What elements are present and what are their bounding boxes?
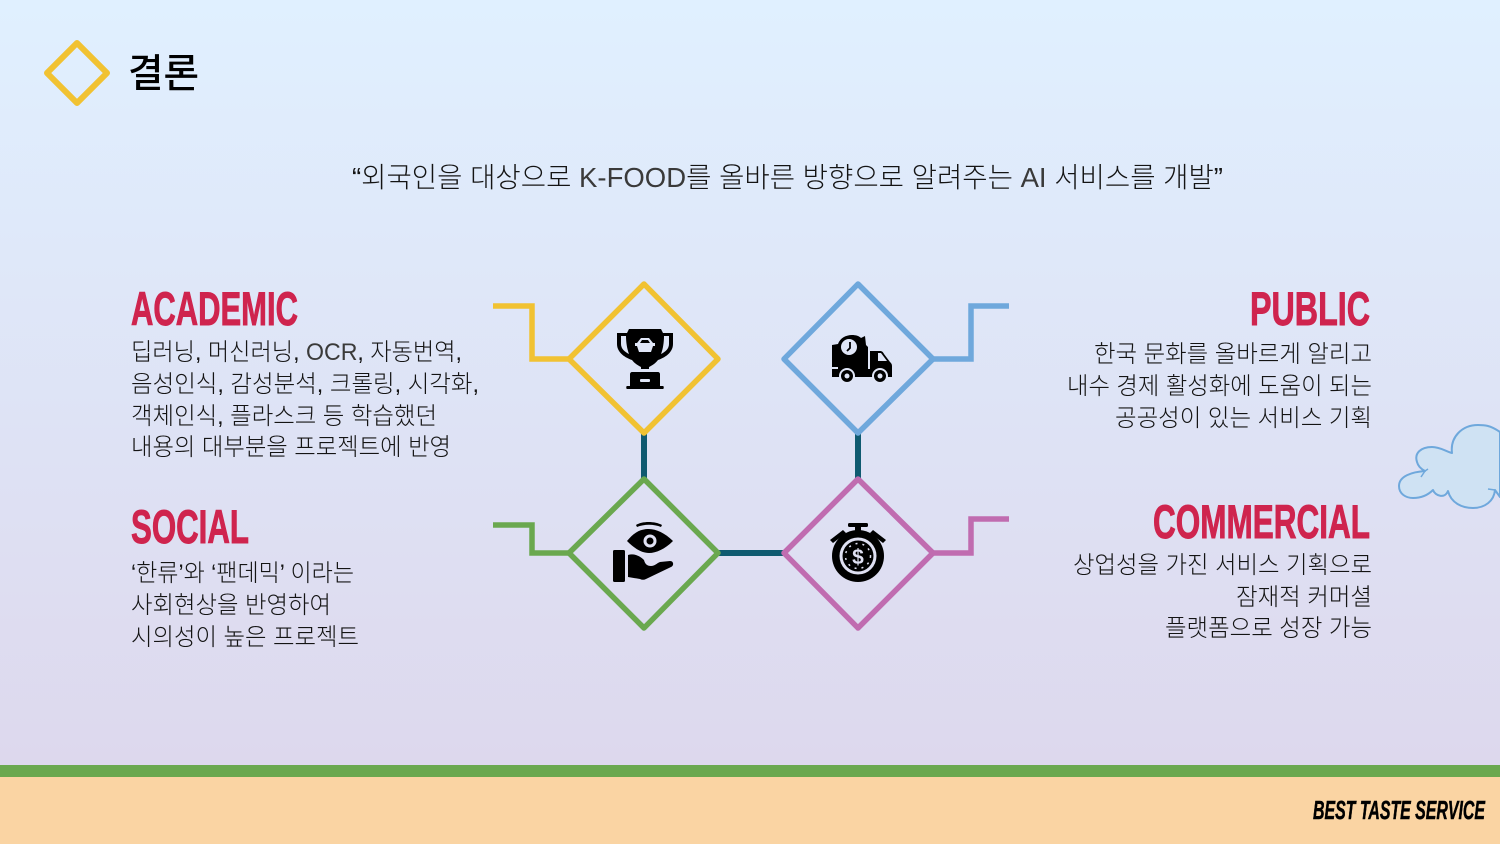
diamond: academic [569,284,718,433]
text block: academic description: 음성인식, 감성분석, 크롤링, 시각화, [131,371,479,398]
arrow: green connector [493,525,570,553]
text block: academic description: 딥러닝, 머신러닝, OCR, 자동번역, [131,339,462,366]
text block: public description: 한국 문화를 올바르게 알리고 [1094,341,1372,368]
icon: stopwatch with dollar [830,523,886,582]
heading: commercial: COMMERCIAL [1153,495,1370,548]
text block: social description: 시의성이 높은 프로젝트 [131,624,359,651]
text block: social description: ‘한류’와 ‘팬데믹’ 이라는 [131,560,354,587]
ground sand band [0,777,1500,844]
icon: delivery truck with clock [832,335,892,384]
icon: title diamond [47,43,107,103]
panel: public text [1067,282,1372,432]
icon: trophy [617,329,673,389]
text block: commercial description: 플랫폼으로 성장 가능 [1165,615,1372,642]
diamond: social [569,479,718,628]
text block: commercial description: 잠재적 커머셜 [1236,584,1372,611]
heading: academic: ACADEMIC [131,282,298,335]
panel: commercial text [1073,495,1372,642]
diamond: commercial [784,479,933,628]
heading: public: PUBLIC [1250,282,1370,335]
arrow: pink connector [932,519,1009,553]
subtitle quote: “외국인을 대상으로 K-FOOD를 올바른 방향으로 알려주는 AI 서비스를 개발” [352,162,1223,193]
arrow: blue connector [932,306,1009,359]
text block: academic description [131,339,479,461]
heading: social: SOCIAL [131,500,249,553]
text block: public description [1067,341,1372,432]
connectors between diamonds [644,434,858,553]
ground green strip [0,765,1500,777]
panel: social text [131,500,359,651]
panel: academic text [131,282,479,461]
icon: stopwatch with dollar: $ [852,546,864,569]
cloud [1399,425,1500,508]
text block: commercial description: 상업성을 가진 서비스 기획으로 [1073,552,1372,579]
text block: academic description: 내용의 대부분을 프로젝트에 반영 [131,434,451,461]
title: 결론 [128,53,199,96]
arrow: yellow connector [493,306,570,359]
text block: public description: 내수 경제 활성화에 도움이 되는 [1067,373,1372,400]
text block: public description: 공공성이 있는 서비스 기획 [1115,405,1372,432]
icon: eye over hand [613,522,673,582]
diamond: public [784,284,933,433]
text block: academic description: 객체인식, 플라스크 등 학습했던 [131,403,437,430]
text block: social description [131,560,359,651]
text block: commercial description [1073,552,1372,642]
text block: social description: 사회현상을 반영하여 [131,592,331,619]
